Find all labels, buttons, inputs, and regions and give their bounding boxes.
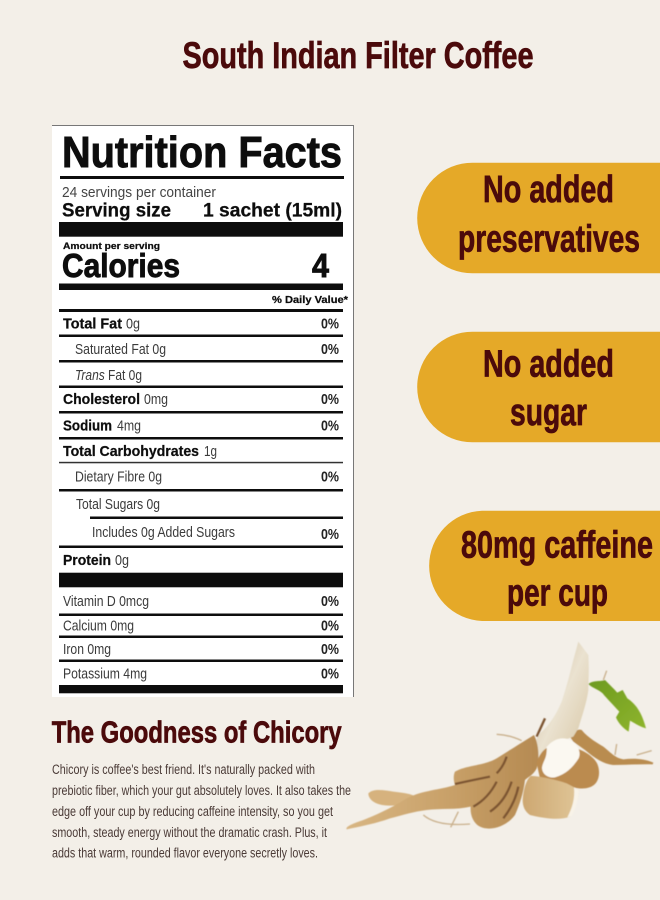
row: cholesterol: 0% [321, 391, 339, 408]
amount per serving: Amount per serving [63, 241, 160, 252]
row: saturated fat: Saturated Fat 0g [75, 341, 166, 358]
row: dietary fibre [75, 469, 339, 486]
row: vitamin d: Vitamin D 0mcg [63, 593, 149, 610]
callout: no added preservatives [417, 163, 660, 273]
panel: nutrition facts label [52, 125, 354, 697]
row: potassium: Potassium 4mg [63, 666, 147, 682]
row: total fat: Total Fat [63, 316, 122, 333]
serving size [62, 200, 342, 222]
root hairs [423, 671, 652, 827]
text block: chicory description [52, 762, 351, 860]
row: added sugars: 0% [321, 526, 339, 543]
row: saturated fat [75, 341, 339, 358]
row: dietary fibre: 0% [321, 469, 339, 486]
text block: chicory description: smooth, steady energy without the dramatic crash. Plus, it [52, 825, 327, 840]
row: iron: Iron 0mg [63, 641, 111, 658]
lower left finger [368, 790, 414, 806]
row: cholesterol [63, 391, 339, 408]
callout: no added preservatives: No added [483, 169, 614, 211]
lower cut piece [523, 776, 579, 819]
row: total sugars: Total Sugars 0g [76, 496, 160, 513]
calories: Calories [62, 247, 180, 284]
text block: chicory description: prebiotic fiber, which your gut absolutely loves. It also takes the [52, 783, 351, 798]
daily value header: % Daily Value* [272, 294, 349, 306]
root creases [455, 718, 545, 818]
text block: chicory description: edge off your cup by reducing caffeine intensity, so you get [52, 804, 333, 819]
row: total carbohydrates: 1g [204, 443, 217, 460]
serving size: Serving size [62, 200, 171, 222]
row: dietary fibre: Dietary Fibre 0g [75, 469, 162, 486]
pale stalk [532, 642, 589, 767]
row: trans fat: Trans Fat 0g [75, 367, 142, 384]
right root branch [570, 730, 653, 765]
main root [346, 735, 538, 829]
row: iron: 0% [321, 641, 339, 658]
row: protein: 0g [115, 552, 129, 569]
callout: no added sugar [417, 332, 660, 442]
row: calcium: Calcium 0mg [63, 618, 134, 634]
callout: caffeine per cup [429, 511, 660, 621]
upper cut piece [537, 745, 599, 788]
chicory leaf [588, 680, 646, 732]
row: added sugars [92, 524, 339, 543]
serving size: 1 sachet (15ml) [203, 200, 342, 222]
row: total carbohydrates: Total Carbohydrates [63, 443, 199, 460]
text block: chicory description: adds that warm, rounded flavor everyone secretly loves. [52, 846, 318, 860]
row: potassium: 0% [321, 666, 339, 682]
row: potassium [63, 666, 339, 682]
row: calcium [63, 618, 339, 634]
calories: 4 [312, 247, 330, 284]
row: sodium: 0% [321, 418, 339, 435]
row: total fat: 0% [321, 316, 339, 333]
calories [62, 247, 330, 284]
row: iron [63, 641, 339, 658]
text block: chicory description: Chicory is coffee's best friend. It's naturally packed with [52, 762, 315, 777]
row: total fat: 0g [126, 316, 140, 333]
row: vitamin d [63, 593, 339, 610]
row: protein: Protein [63, 552, 111, 569]
row: cholesterol: Cholesterol [63, 391, 140, 408]
servings per container: 24 servings per container [62, 184, 216, 201]
row: total fat [63, 316, 339, 333]
row: sodium: 4mg [117, 418, 141, 435]
row: sodium [63, 418, 339, 435]
row: calcium: 0% [321, 618, 339, 634]
title: South Indian Filter Coffee [182, 35, 534, 76]
row: added sugars: Includes 0g Added Sugars [92, 524, 235, 541]
row: sodium: Sodium [63, 418, 112, 435]
row: saturated fat: 0% [321, 341, 339, 358]
callout: no added sugar: No added [483, 344, 614, 386]
row: vitamin d: 0% [321, 593, 339, 610]
icon: chicory root illustration [346, 642, 653, 829]
heading: the goodness of chicory: The Goodness of Chicory [52, 714, 342, 750]
callout: no added sugar: sugar [510, 392, 587, 434]
callout: caffeine per cup: per cup [507, 573, 608, 615]
nutrition heading: Nutrition Facts [62, 128, 342, 177]
row: cholesterol: 0mg [144, 391, 168, 408]
